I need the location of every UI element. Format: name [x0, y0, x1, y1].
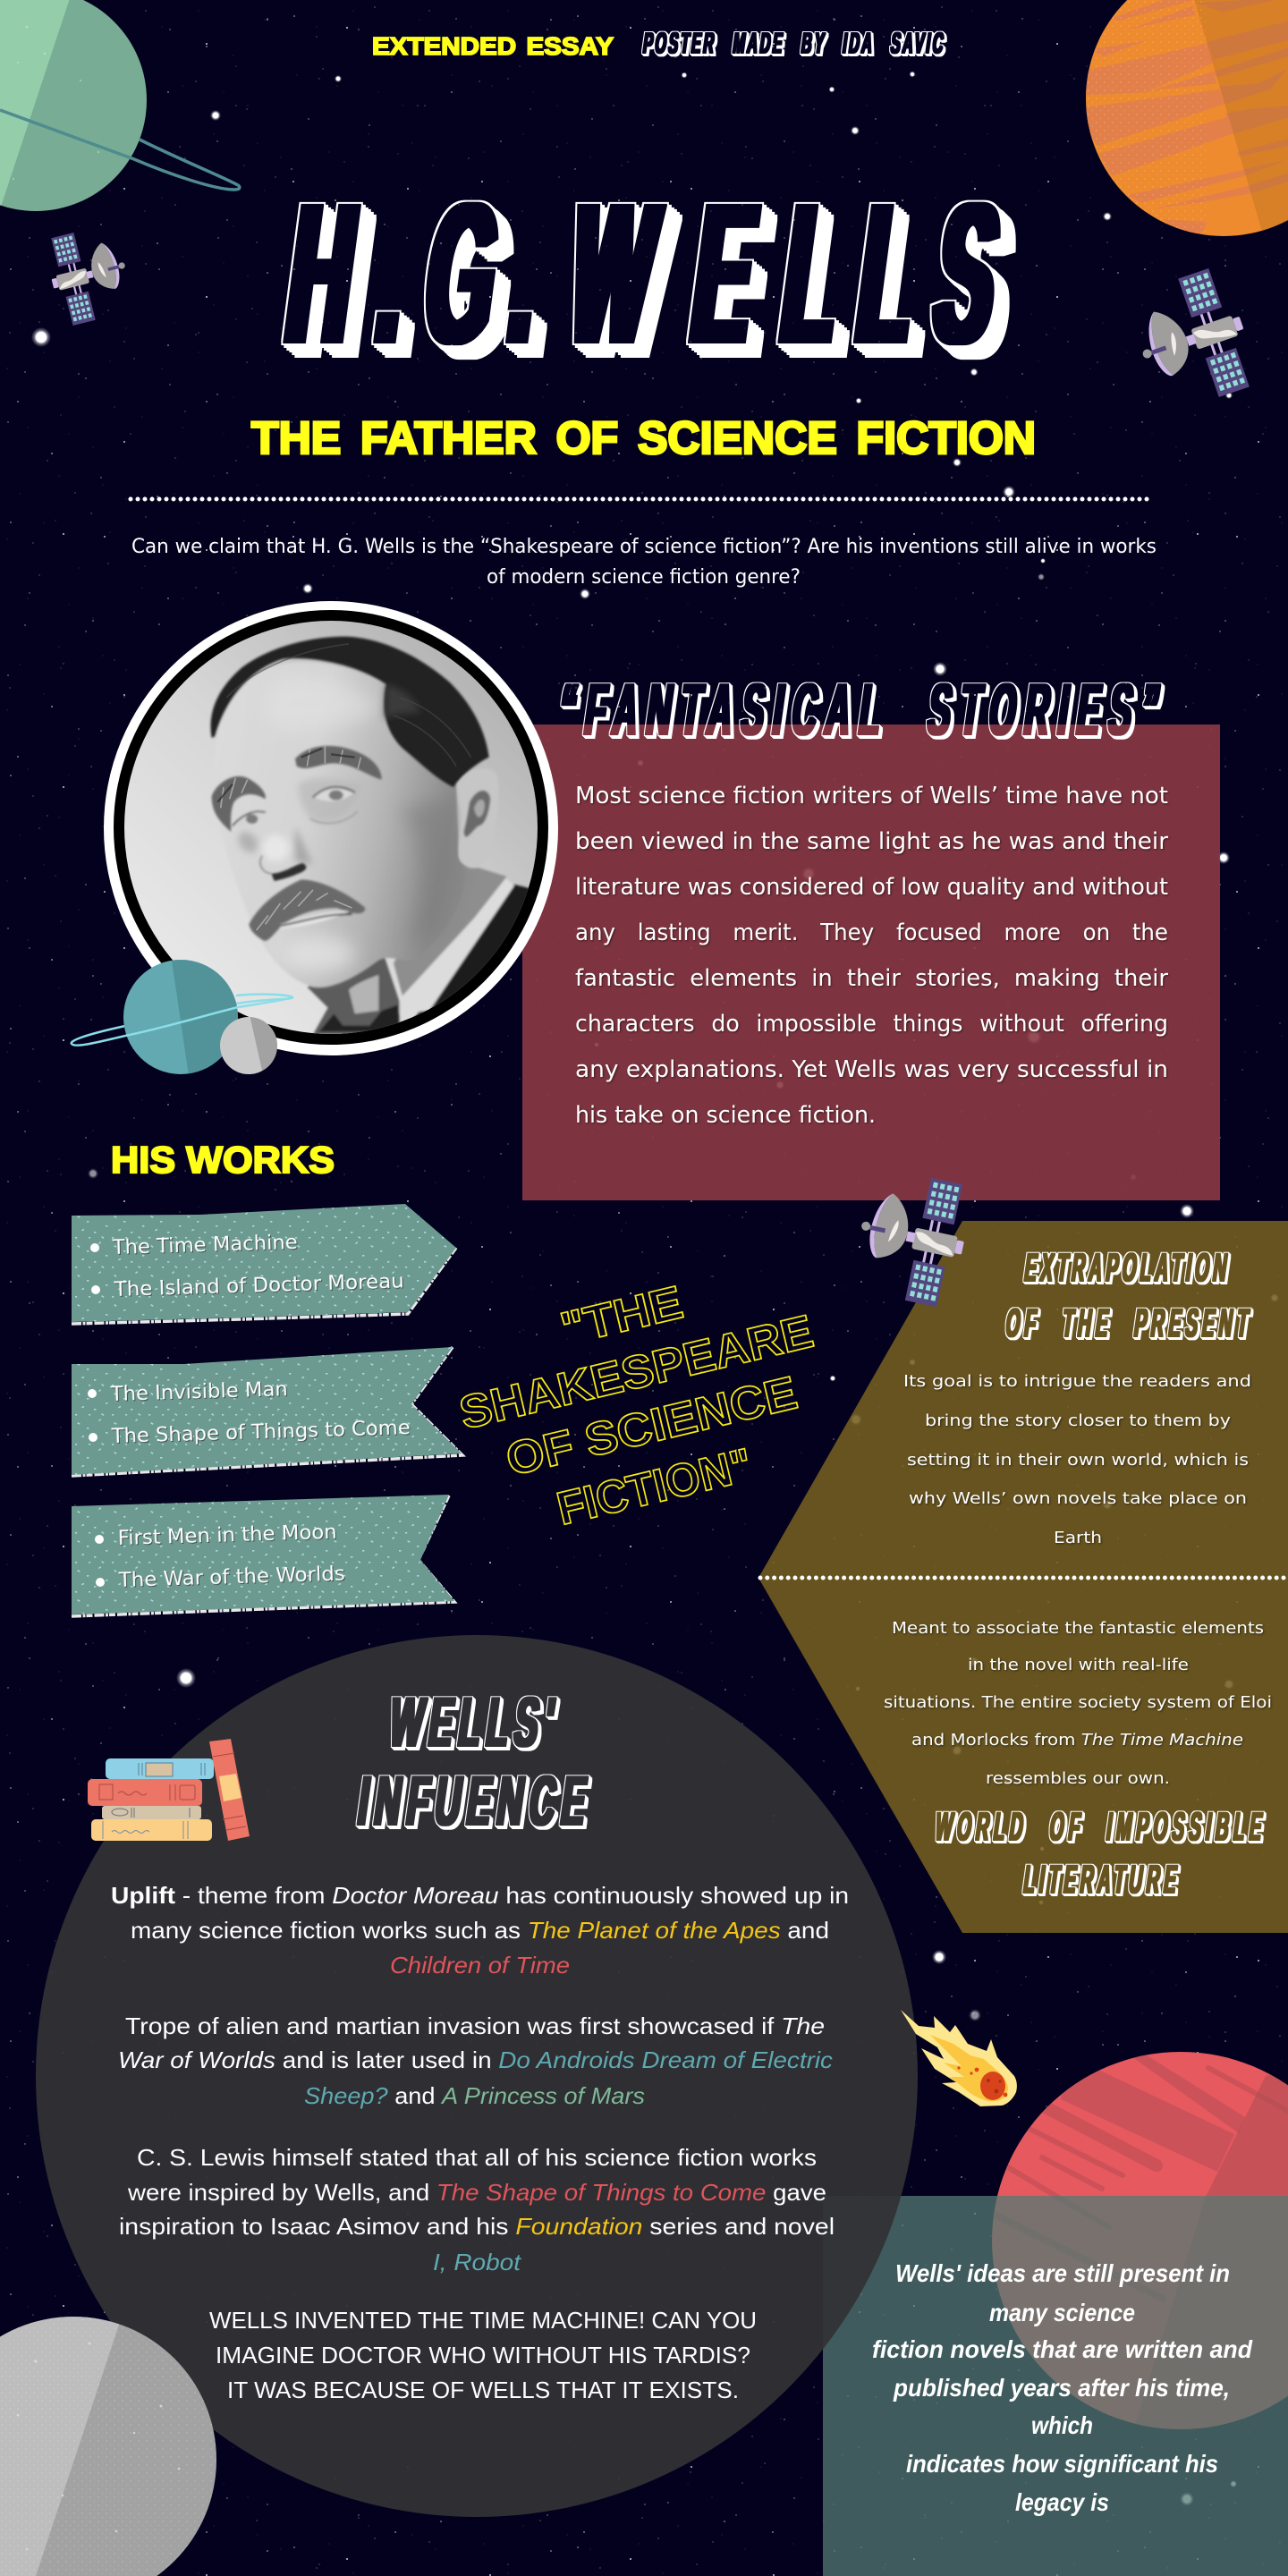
quote: the shakespeare of science fiction: SHAKESPEARE	[454, 1306, 818, 1440]
heading: wells' influence: WELLS'	[386, 1684, 559, 1762]
ear	[212, 746, 498, 941]
body text: fantastical stories: characters do impossible things without offering	[575, 1011, 1168, 1038]
panel: extrapolation and impossible literature	[758, 1221, 1288, 1933]
paragraph: alien invasion: Sheep? and A Princess of Mars	[304, 2082, 645, 2109]
list item: The Invisible Man	[109, 1378, 288, 1406]
list item: First Men in the Moon	[117, 1521, 337, 1550]
quote: the shakespeare of science fiction: FICTION"	[552, 1439, 758, 1536]
paragraph: alien invasion: War of Worlds and is later used in Do Androids Dream of Electric	[118, 2046, 833, 2073]
icon: comet	[901, 2010, 1017, 2106]
list item: The Shape of Things to Come	[110, 1417, 411, 1448]
paragraph: lewis and asimov: I, Robot	[433, 2249, 522, 2275]
body text: impossible literature: and Morlocks from The Time Machine	[911, 1731, 1243, 1750]
body text: fantastical stories: Most science fiction writers of Wells’ time have not	[575, 783, 1168, 809]
legacy text: many science	[989, 2299, 1135, 2326]
paragraph: lewis and asimov: inspiration to Isaac Asimov and his Foundation series and novel	[119, 2213, 835, 2240]
paragraph: uplift: Uplift - theme from Doctor Moreau has continuously showed up in	[111, 1882, 849, 1909]
legacy text: indicates how significant his	[906, 2450, 1218, 2478]
body text: impossible literature: situations. The entire society system of Eloi	[884, 1693, 1272, 1712]
label: extended essay: EXTENDED ESSAY	[372, 32, 614, 60]
paragraph: time machine: IT WAS BECAUSE OF WELLS THAT IT EXISTS.	[227, 2377, 739, 2403]
heading: wells' influence	[354, 1684, 591, 1841]
satellite: top right	[1123, 264, 1262, 416]
body text: extrapolation: bring the story closer to them by	[925, 1411, 1231, 1430]
body text: extrapolation: why Wells’ own novels take place on	[909, 1489, 1247, 1508]
legacy text: which	[1031, 2411, 1093, 2439]
legacy text	[872, 2259, 1253, 2516]
intro question	[131, 536, 1157, 589]
body text: extrapolation	[903, 1372, 1251, 1547]
hair	[211, 637, 489, 787]
planet: teal with ring	[70, 960, 293, 1074]
paragraph: uplift: Children of Time	[390, 1952, 570, 1979]
body text: extrapolation: Its goal is to intrigue the readers and	[903, 1372, 1251, 1391]
body text: fantastical stories	[575, 783, 1168, 1129]
body text: fantastical stories: any lasting merit. They focused more on the	[575, 919, 1168, 946]
paragraph: lewis and asimov: C. S. Lewis himself stated that all of his science fiction works	[137, 2144, 817, 2171]
planet: orange	[1082, 0, 1288, 257]
ribbon: works 1	[72, 1204, 456, 1324]
body text: fantastical stories: been viewed in the same light as he was and their	[575, 828, 1168, 855]
list item: The Time Machine	[111, 1232, 298, 1259]
quote: the shakespeare of science fiction: "THE	[555, 1276, 688, 1356]
paragraph: uplift: many science fiction works such as The Planet of the Apes and	[131, 1917, 829, 1944]
legacy text: legacy is	[1015, 2488, 1109, 2516]
body text: impossible literature: Meant to associate the fantastic elements	[892, 1619, 1264, 1638]
heading: world of impossible literature: WORLD OF IMPOSSIBLE	[933, 1806, 1265, 1849]
paragraph: time machine: WELLS INVENTED THE TIME MACHINE! CAN YOU	[209, 2307, 757, 2334]
legacy text: fiction novels that are written and	[872, 2335, 1253, 2363]
list item: The War of the Worlds	[117, 1563, 345, 1592]
title: H.G.WELLS	[277, 161, 1010, 386]
body text: impossible literature: ressembles our own.	[986, 1769, 1170, 1788]
planet: gray	[0, 2308, 219, 2576]
paragraph: lewis and asimov: were inspired by Wells, and The Shape of Things to Come gave	[127, 2179, 826, 2206]
body text: fantastical stories: his take on science fiction.	[575, 1102, 876, 1129]
heading: extrapolation of the present	[1004, 1247, 1251, 1345]
body text: impossible literature: in the novel with real-life	[968, 1656, 1189, 1674]
label: poster credit: POSTER MADE BY IDA SAVIC	[641, 28, 945, 60]
paragraph: alien invasion	[118, 2012, 833, 2109]
heading: fantastical stories: “FANTASICAL STORIES”	[554, 669, 1165, 750]
list item: The Island of Doctor Moreau	[113, 1270, 404, 1301]
body text: impossible literature	[884, 1619, 1272, 1788]
legacy text: published years after his time,	[893, 2374, 1230, 2402]
paragraph: lewis and asimov	[119, 2144, 835, 2275]
portrait of H. G. Wells	[104, 601, 558, 1055]
body text: fantastical stories: any explanations. Yet Wells was very successful in	[575, 1056, 1168, 1083]
panel: legacy statement	[823, 2196, 1288, 2576]
heading: his works: HIS WORKS	[111, 1139, 335, 1181]
ribbon: works 3	[72, 1495, 454, 1616]
heading: extrapolation of the present: EXTRAPOLATION	[1022, 1247, 1230, 1290]
facial hair texture	[221, 745, 360, 930]
paragraph: alien invasion: Trope of alien and martian invasion was first showcased if The	[125, 2012, 825, 2039]
quote: the shakespeare of science fiction: OF SCIENCE	[501, 1367, 802, 1487]
icon: stack of books	[88, 1739, 250, 1841]
paragraph: time machine	[209, 2307, 757, 2403]
legacy text: Wells' ideas are still present in	[895, 2259, 1230, 2287]
planet: green with ring	[0, 0, 240, 215]
body text: extrapolation: setting it in their own world, which is	[907, 1451, 1249, 1470]
subtitle: THE FATHER OF SCIENCE FICTION	[251, 412, 1036, 463]
body text: fantastical stories: fantastic elements in their stories, making their	[575, 965, 1168, 992]
paragraph: uplift	[111, 1882, 849, 1979]
ribbon: works 2	[72, 1347, 462, 1476]
intro question: of modern science fiction genre?	[487, 566, 801, 589]
planet: red	[992, 2039, 1288, 2451]
satellite: top left	[42, 223, 136, 328]
heading: extrapolation of the present: OF THE PRESENT	[1004, 1302, 1251, 1345]
quote: the shakespeare of science fiction	[454, 1276, 818, 1536]
heading: wells' influence: INFUENCE	[354, 1763, 591, 1841]
top line	[372, 28, 945, 60]
intro question: Can we claim that H. G. Wells is the “Shakespeare of science fiction”? Are his inventions still alive in works	[131, 536, 1157, 558]
heading: world of impossible literature: LITERATURE	[1021, 1859, 1180, 1902]
body text: fantastical stories: literature was considered of low quality and without	[575, 874, 1168, 901]
panel: wells' influence	[36, 1635, 918, 2517]
panel: fantastical stories	[522, 724, 1220, 1200]
paragraph: time machine: IMAGINE DOCTOR WHO WITHOUT HIS TARDIS?	[216, 2342, 750, 2368]
heading: world of impossible literature	[933, 1806, 1265, 1902]
body text: extrapolation: Earth	[1054, 1529, 1102, 1547]
satellite: over panels	[848, 1165, 976, 1309]
